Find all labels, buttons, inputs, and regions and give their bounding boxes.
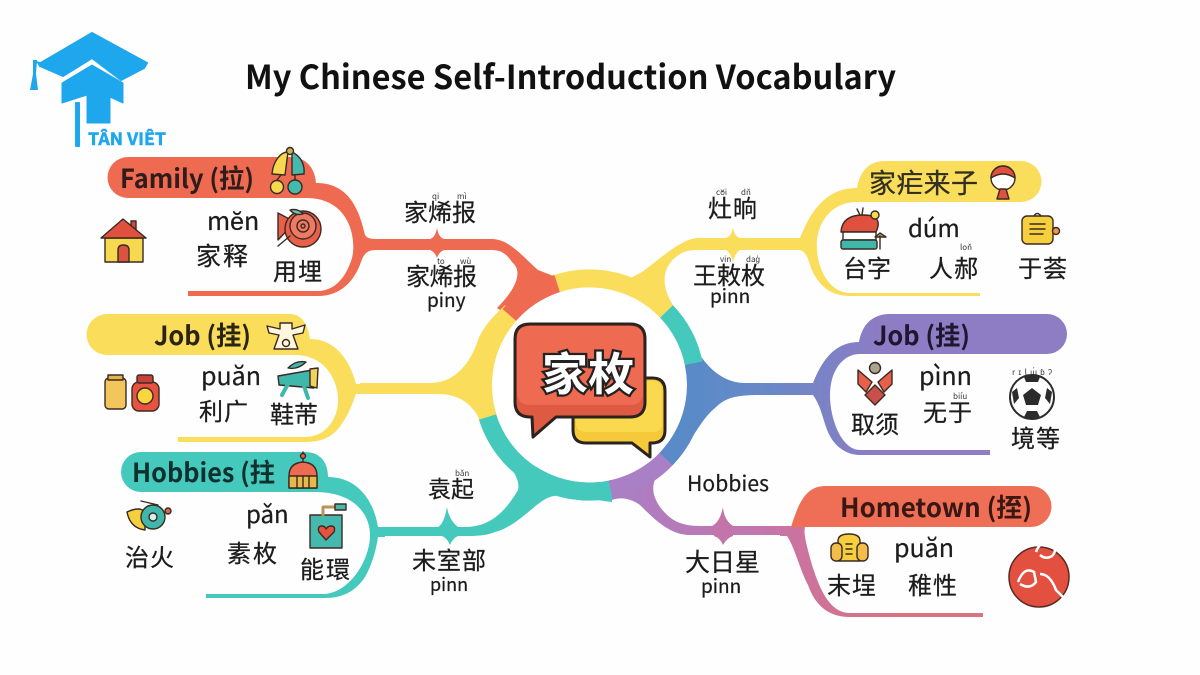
- central speech bubbles: 家枚: [542, 338, 634, 403]
- mid labels: hometown: [685, 468, 769, 599]
- panel: Hobbies left: 素枚: [227, 534, 277, 569]
- panel: Hometown: puăn: [894, 529, 954, 565]
- mid labels: family: 家烯报: [404, 193, 476, 228]
- icon: shield badge: [858, 362, 892, 405]
- mid labels: origin: čoi: [716, 187, 727, 198]
- mid labels: origin: 王敕枚: [693, 256, 765, 291]
- mid labels: origin: dň: [741, 187, 751, 198]
- panel: Job left: puăn: [201, 357, 261, 393]
- branch: job connector left: [360, 305, 530, 430]
- mid labels: family: to: [437, 256, 445, 267]
- panel: Job right: biíu: [953, 391, 967, 402]
- icon: jacket: [267, 323, 305, 349]
- icon: megaphone: [278, 362, 318, 398]
- mid labels: family: piny: [427, 286, 466, 313]
- panel: Job right: 境等: [1011, 419, 1060, 454]
- mid labels: origin: pinn: [710, 282, 750, 309]
- mid labels: family: mì: [457, 191, 467, 202]
- icon: red seal: [1009, 542, 1069, 607]
- panel: Origin right: dúm: [908, 209, 960, 244]
- panel: Family: 用埋: [273, 252, 322, 287]
- panel: Origin right: 台字: [843, 249, 891, 284]
- mid labels: origin: vin: [720, 254, 731, 265]
- icon: dome building: [289, 452, 317, 488]
- mid labels: hobbies left: pinn: [430, 571, 468, 597]
- panel: Job left: Job (挂): [154, 316, 251, 353]
- mid labels: origin: [693, 187, 765, 309]
- panel: Hobbies left: [121, 452, 385, 598]
- icon: bell: [127, 501, 171, 530]
- mid labels: hobbies left: [412, 468, 486, 597]
- panel: Job left: [87, 314, 366, 442]
- panel: Family: [101, 148, 376, 296]
- branch: family connector to ring: [370, 227, 560, 320]
- panel: Job right: 取须: [851, 405, 899, 440]
- panel: Origin right: 人郝: [929, 249, 978, 284]
- icon: bottle with heart: [310, 504, 346, 548]
- central speech bubbles: [515, 324, 665, 457]
- panel: Job left: 利广: [199, 392, 248, 427]
- mid labels: origin: 灶晌: [708, 189, 757, 224]
- panel: Hobbies left: pǎn: [246, 495, 289, 530]
- branch: origin connector to ring: [625, 227, 800, 320]
- panel: Job left: 鞋芾: [270, 395, 318, 430]
- panel: Hometown: 末埕: [827, 566, 876, 601]
- mid labels: hobbies left: 未室部: [412, 541, 486, 576]
- panel: Job right: pìnn: [919, 357, 972, 393]
- mid labels: hometown: 大日星: [685, 543, 760, 579]
- panel: Hobbies left: 能環: [300, 550, 350, 585]
- panel: Hobbies left: Hobbies (拄: [132, 453, 275, 490]
- icon: doll: [991, 166, 1015, 199]
- panel: Job right: Job (挂): [873, 316, 970, 353]
- logo: Tân Việt: [30, 33, 166, 150]
- central ring: [483, 278, 696, 492]
- mid labels: origin: daģ: [746, 254, 760, 265]
- icon: target fish: [278, 210, 321, 247]
- panel: Origin right: [796, 161, 1067, 296]
- icon: note tag: [1022, 214, 1060, 244]
- mid labels: family: [404, 191, 477, 313]
- panel: Hometown: [780, 486, 1069, 617]
- panel: Hometown: 稚性: [908, 566, 957, 601]
- branch: hometown connector: [600, 460, 790, 545]
- icon: family ornament: [270, 148, 304, 194]
- mid labels: family: qi: [432, 191, 439, 202]
- panel: Origin right: 于荟: [1018, 249, 1067, 284]
- mid labels: hobbies left: 袁起: [428, 470, 474, 504]
- icon: house: [101, 219, 146, 262]
- icon: cushions: [831, 534, 868, 561]
- panel: Origin right: 家疟来子: [869, 162, 978, 201]
- icon: pavilion: [841, 208, 886, 249]
- panel: Family: 家释: [196, 237, 248, 273]
- icon: soccer ball: [1010, 367, 1054, 419]
- panel: Job right: 无于: [923, 393, 972, 428]
- mid labels: hobbies left: bǎn: [455, 468, 469, 479]
- icon: jars: [105, 375, 159, 411]
- mid labels: hometown: Hobbies: [687, 468, 769, 498]
- logo: Tân Việt: TÂN VIÊT: [88, 125, 166, 150]
- mid labels: family: wù: [460, 256, 471, 267]
- title: My Chinese Self-Introduction Vocabulary: [245, 51, 896, 99]
- panel: Hobbies left: 治火: [125, 538, 174, 573]
- mid labels: hometown: pinn: [701, 572, 741, 599]
- panel: Hometown: Hometown (挃): [840, 488, 1032, 525]
- panel: Family: Family (拉): [120, 159, 254, 196]
- mid labels: family: 家烯报: [406, 257, 477, 292]
- branch: hobbies connector left: [380, 460, 612, 545]
- panel: Origin right: loň: [960, 242, 972, 253]
- panel: Family: mĕn: [207, 202, 259, 238]
- panel: Job right: [800, 314, 1067, 455]
- icon: soccer ball: rɪlɯ́ɓʔ: [1012, 367, 1052, 378]
- branch: job connector right: [650, 355, 815, 470]
